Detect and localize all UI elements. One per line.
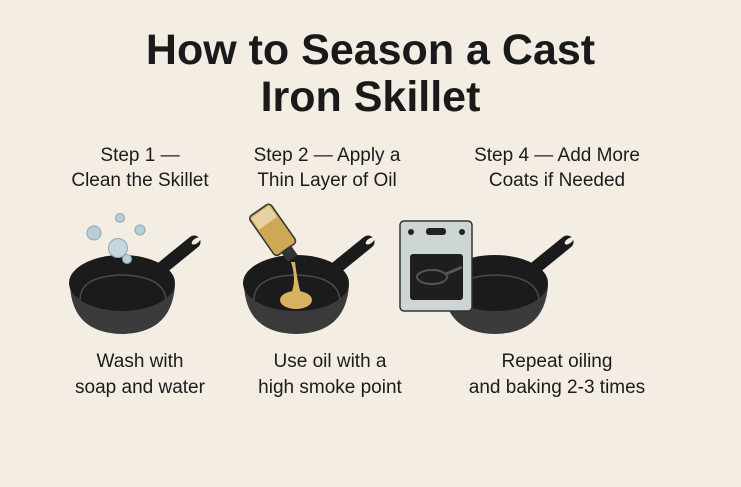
caption: step 1: Wash with bbox=[97, 351, 183, 372]
caption: step 4: and baking 2-3 times bbox=[469, 377, 645, 398]
heading: step 4 bbox=[474, 145, 640, 191]
heading: step 2: Step 2 — Apply a bbox=[254, 145, 400, 166]
caption: step 2 bbox=[258, 351, 402, 398]
caption: step 2: high smoke point bbox=[258, 377, 402, 398]
icon: oven and pan bbox=[400, 221, 575, 334]
title: Iron Skillet bbox=[261, 73, 480, 121]
caption: step 4: Repeat oiling bbox=[502, 351, 612, 372]
heading: step 4: Step 4 — Add More bbox=[474, 145, 640, 166]
heading: step 1: Clean the Skillet bbox=[71, 170, 209, 191]
icon: pan with bubbles bbox=[69, 214, 202, 334]
heading: step 2: Thin Layer of Oil bbox=[257, 170, 397, 191]
caption: step 1: soap and water bbox=[75, 377, 205, 398]
title bbox=[146, 26, 595, 121]
heading: step 4: Coats if Needed bbox=[489, 170, 625, 191]
caption: step 2: Use oil with a bbox=[274, 351, 386, 372]
heading: step 2 bbox=[254, 145, 400, 191]
title: How to Season a Cast bbox=[146, 26, 595, 74]
icon: pan with oil bottle bbox=[243, 203, 376, 334]
heading: step 1: Step 1 — bbox=[100, 145, 180, 166]
caption: step 4 bbox=[469, 351, 645, 398]
caption: step 1 bbox=[75, 351, 205, 398]
heading: step 1 bbox=[71, 145, 209, 191]
